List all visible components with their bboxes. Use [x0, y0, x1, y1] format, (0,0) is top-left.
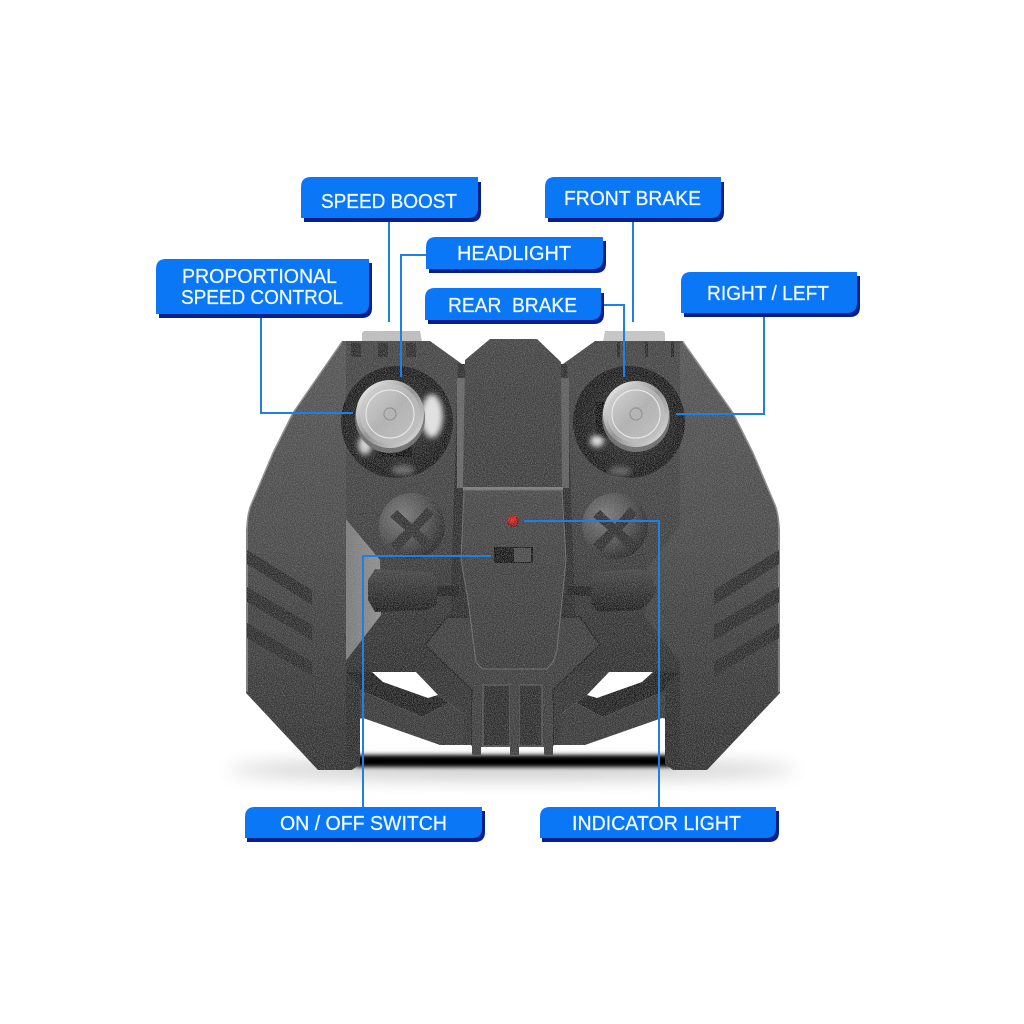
lower arm: right: [561, 684, 682, 745]
top slider button: right: [603, 331, 665, 342]
toggle stick: left: [368, 569, 459, 612]
label: speed boost: SPEED BOOST: [321, 191, 457, 213]
arm joint: left: [415, 671, 472, 745]
vent stripes: left: [247, 550, 312, 676]
leg inner: left: [344, 670, 360, 770]
outer edge highlights: [247, 342, 779, 692]
label: front brake: [545, 177, 724, 222]
label: headlight: [426, 237, 606, 273]
label: proportional speed control: SPEED CONTROL: [181, 287, 343, 309]
leader lines: [261, 218, 764, 808]
channel behind center column: [450, 364, 575, 620]
wedge highlight: left: [345, 518, 381, 662]
label: indicator light: INDICATOR LIGHT: [572, 813, 741, 835]
arm joint: right: [553, 671, 610, 745]
floor shadow: [227, 755, 797, 778]
remote control body: [246, 331, 780, 770]
label: on / off switch: ON / OFF SWITCH: [280, 813, 447, 835]
slots on top: right: [617, 342, 674, 357]
middle body layer: [345, 341, 680, 672]
vent stripes: right: [714, 550, 779, 676]
leg inner: right: [665, 670, 682, 770]
center column lower: [461, 490, 566, 669]
bottom vents: [472, 683, 553, 755]
label: speed boost: [301, 177, 481, 222]
lower arm: left: [346, 684, 464, 745]
side rail: left: [457, 378, 465, 488]
slots on top: left: [351, 343, 416, 357]
center column top: [463, 339, 562, 488]
side rail: right: [561, 378, 569, 488]
label: right / left: [681, 272, 860, 317]
label: proportional speed control: [156, 259, 372, 318]
label: proportional speed control: PROPORTIONAL: [182, 266, 337, 288]
joystick: right: [573, 366, 685, 478]
label: right / left: RIGHT / LEFT: [707, 283, 829, 305]
label: indicator light: [540, 807, 779, 842]
toggle stick: right: [568, 569, 657, 612]
label: front brake: FRONT BRAKE: [564, 188, 701, 210]
label: on / off switch: [245, 807, 485, 842]
label: rear brake: REAR BRAKE: [448, 295, 577, 317]
inner arm dark: left: [346, 672, 449, 717]
label: rear brake: [425, 288, 604, 324]
left outer panel: [246, 341, 346, 770]
screw: left: [379, 493, 445, 559]
center divider: [463, 487, 563, 490]
top slider button: left: [362, 331, 422, 342]
lower assembly: [425, 617, 600, 745]
on/off switch: [494, 547, 533, 563]
right outer panel: [645, 341, 780, 770]
indicator light: [507, 515, 519, 527]
inner arm dark: right: [576, 672, 682, 717]
screw: right: [582, 493, 648, 559]
label: headlight: HEADLIGHT: [457, 243, 571, 265]
joystick: left: [341, 366, 453, 478]
